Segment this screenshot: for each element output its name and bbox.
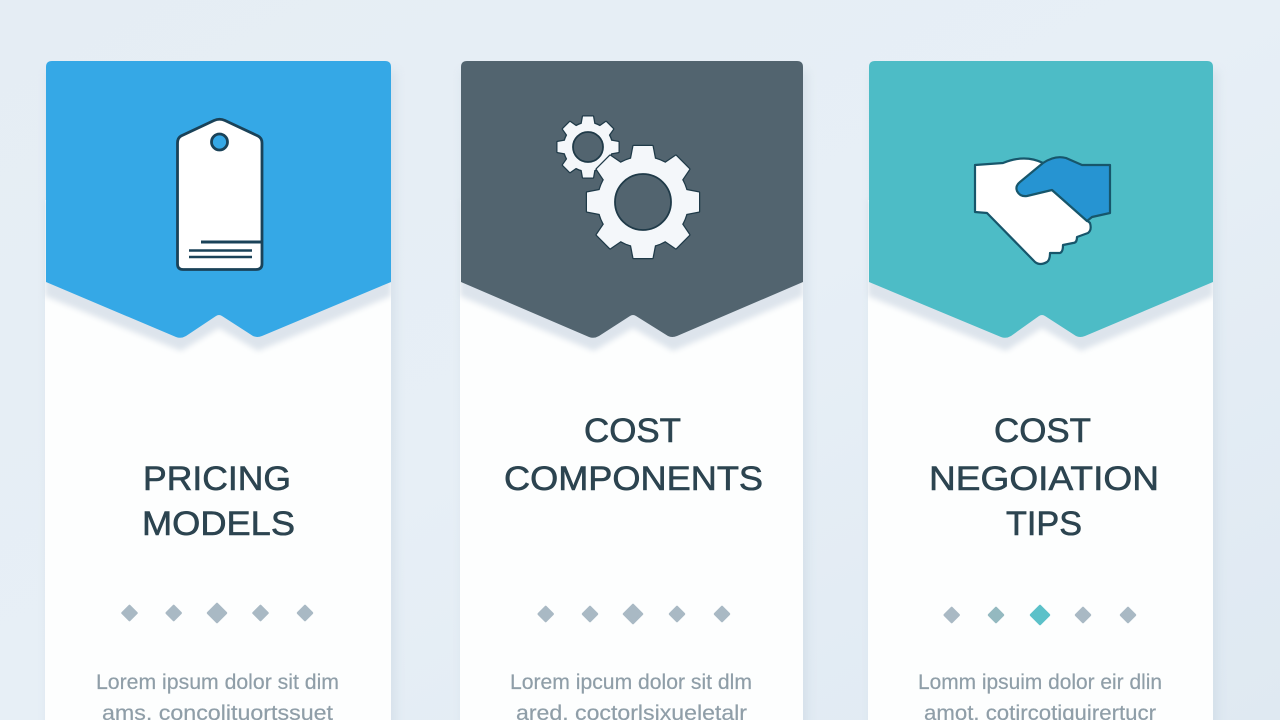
icon: gears [558,116,699,258]
panel: cost components [460,61,808,720]
body text [96,671,339,720]
heading: cost negotiation tips: COST [994,412,1091,450]
heading: cost components: COST [584,412,681,450]
icon: handshake [975,157,1110,264]
heading: pricing models [142,460,295,543]
heading: cost components [504,412,763,498]
heading: pricing models: PRICING [143,460,291,498]
heading: cost negotiation tips: TIPS [1006,505,1082,543]
body text: Lorem ipcum dolor sit dlm [510,671,752,694]
body text: Lomm ipsuim dolor eir dlin [918,671,1162,694]
heading: pricing models: MODELS [142,505,295,543]
header: pricing models [46,61,391,338]
header: cost negotiation tips [869,61,1213,338]
header: cost components [461,61,803,338]
heading: cost components: COMPONENTS [504,460,763,498]
heading: cost negotiation tips [929,412,1159,543]
body text [918,671,1162,720]
body text: Lorem ipsum dolor sit dim [96,671,339,694]
body text [510,671,752,720]
icon: price tag [178,119,262,270]
diamond row [945,606,1135,624]
diamond row [539,605,729,623]
heading: cost negotiation tips: NEGOIATION [929,460,1159,498]
diamond row [122,604,312,622]
panel: pricing models [45,61,396,720]
panel: cost negotiation tips [868,61,1218,720]
